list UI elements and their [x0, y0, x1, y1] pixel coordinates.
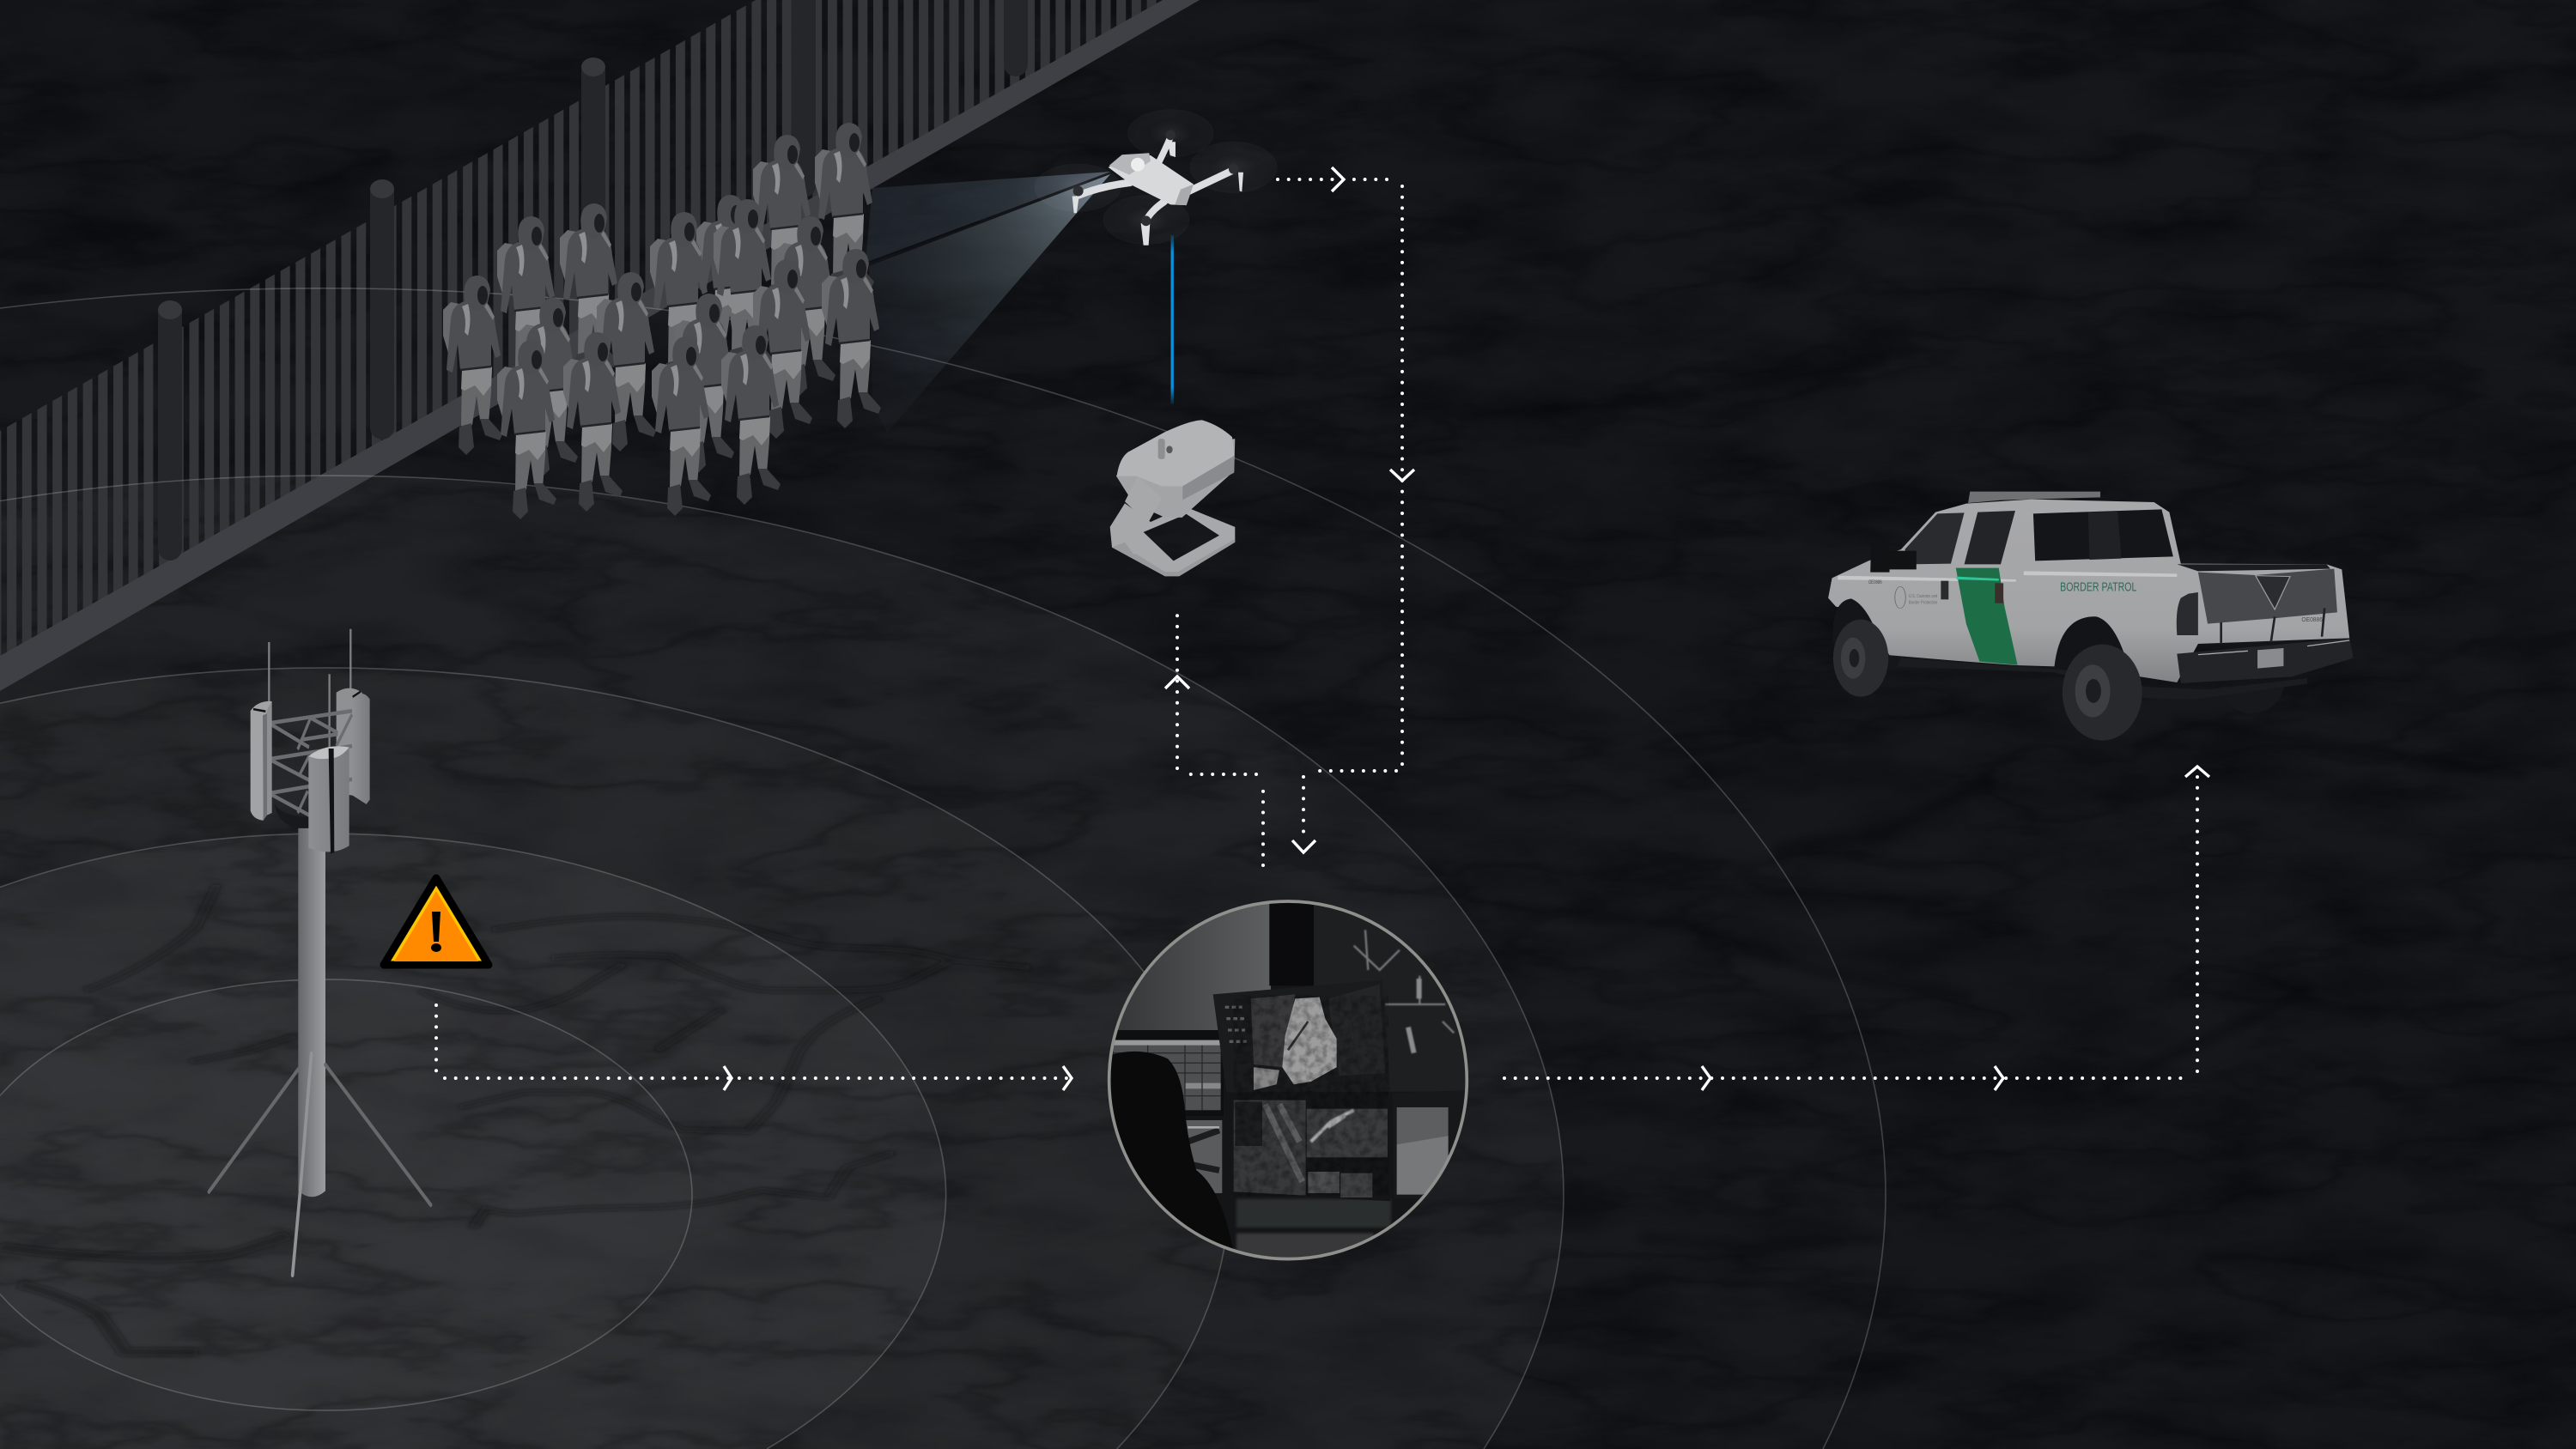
rear right tyre — [2219, 687, 2284, 714]
rear window — [2033, 509, 2173, 561]
fence palings — [0, 0, 1163, 659]
coverage zone rings — [0, 288, 1886, 1449]
drone — [1035, 110, 1277, 246]
door seal — [1895, 586, 1905, 609]
rear bumper — [2177, 638, 2354, 683]
tailgate cover — [2198, 569, 2337, 624]
tailgate straps — [2221, 608, 2324, 644]
front panel — [308, 746, 349, 853]
monitor image grain — [1234, 996, 1388, 1196]
rear door window — [1965, 511, 2015, 564]
dock antenna — [1158, 439, 1165, 459]
door agency lettering: U.S. Customs and — [1909, 594, 1938, 599]
fence posts — [158, 0, 1028, 561]
drone body — [1109, 155, 1194, 205]
border patrol truck — [1828, 492, 2354, 741]
main map monitor — [1212, 989, 1337, 1090]
operations centre photo circle — [1108, 900, 1468, 1264]
antenna rods — [269, 629, 350, 749]
border fence — [0, 0, 1200, 691]
border patrol lettering: BORDER PATROL — [2060, 579, 2137, 594]
dock stand — [1110, 503, 1235, 576]
stripe highlight — [1957, 577, 1999, 581]
photo ring — [1109, 901, 1467, 1259]
dock lower shell — [1116, 439, 1235, 518]
mount ring — [275, 804, 308, 833]
cell tower — [209, 629, 431, 1275]
green door stripe — [1956, 568, 2018, 665]
tower pole — [298, 828, 325, 1197]
propeller discs — [1035, 110, 1277, 245]
rear window insert — [2088, 512, 2122, 560]
bed rail — [2177, 564, 2330, 571]
fence base band — [0, 0, 1200, 691]
side mirror — [1870, 541, 1917, 573]
truck chassis under shadow — [1897, 658, 2307, 700]
rear right panel — [337, 688, 370, 804]
flow: operations to truck — [1504, 767, 2209, 1090]
truck body highlight — [1838, 571, 2177, 582]
right camera monitor — [1396, 1107, 1449, 1195]
flow: warning to operations — [436, 1005, 1072, 1090]
front wheel arch — [1832, 598, 1884, 654]
drone legs — [1072, 142, 1243, 246]
door agency lettering: Border Protection — [1909, 600, 1938, 605]
blue data link — [1171, 235, 1174, 404]
truck body — [1828, 500, 2349, 682]
tailgate number: OE0886 — [2301, 615, 2323, 623]
tailgate cover emblem — [2256, 576, 2290, 609]
arrow chevron — [1165, 676, 1189, 688]
door agency lettering — [1909, 594, 1938, 605]
licence plate — [2257, 648, 2283, 669]
group of soldiers — [443, 123, 881, 519]
truss frame — [269, 711, 352, 815]
flow: drone to operations — [1278, 167, 1414, 852]
coverage zone fills — [0, 288, 1886, 1449]
roof light bar — [1968, 492, 2100, 503]
rear wheel arch — [2054, 616, 2131, 676]
border patrol truck: OE0886 — [1868, 579, 1882, 585]
door handles — [1941, 581, 1948, 599]
drone arms — [1079, 136, 1232, 220]
arrow chevrons — [1292, 167, 1414, 852]
front door window — [1905, 512, 1965, 564]
front wheel — [1833, 620, 1888, 697]
lower video monitor — [1233, 1100, 1391, 1202]
left panel — [251, 701, 272, 821]
dock lid — [1117, 420, 1234, 486]
docking station — [1110, 420, 1235, 576]
arrow chevrons — [724, 1066, 1072, 1090]
rear wheel — [2063, 645, 2142, 741]
photo room backdrop — [1108, 900, 1468, 1264]
drone camera light cone — [866, 163, 1133, 433]
dock door — [1125, 476, 1162, 524]
tail light — [2177, 592, 2198, 635]
left table monitor — [1110, 1030, 1224, 1193]
operator silhouette — [1113, 1051, 1233, 1248]
flow: operations to dock — [1165, 614, 1263, 865]
drone motors — [1073, 130, 1238, 226]
arrow chevrons — [1702, 767, 2209, 1090]
guy wires — [209, 1054, 431, 1275]
warning triangle icon — [384, 878, 489, 965]
